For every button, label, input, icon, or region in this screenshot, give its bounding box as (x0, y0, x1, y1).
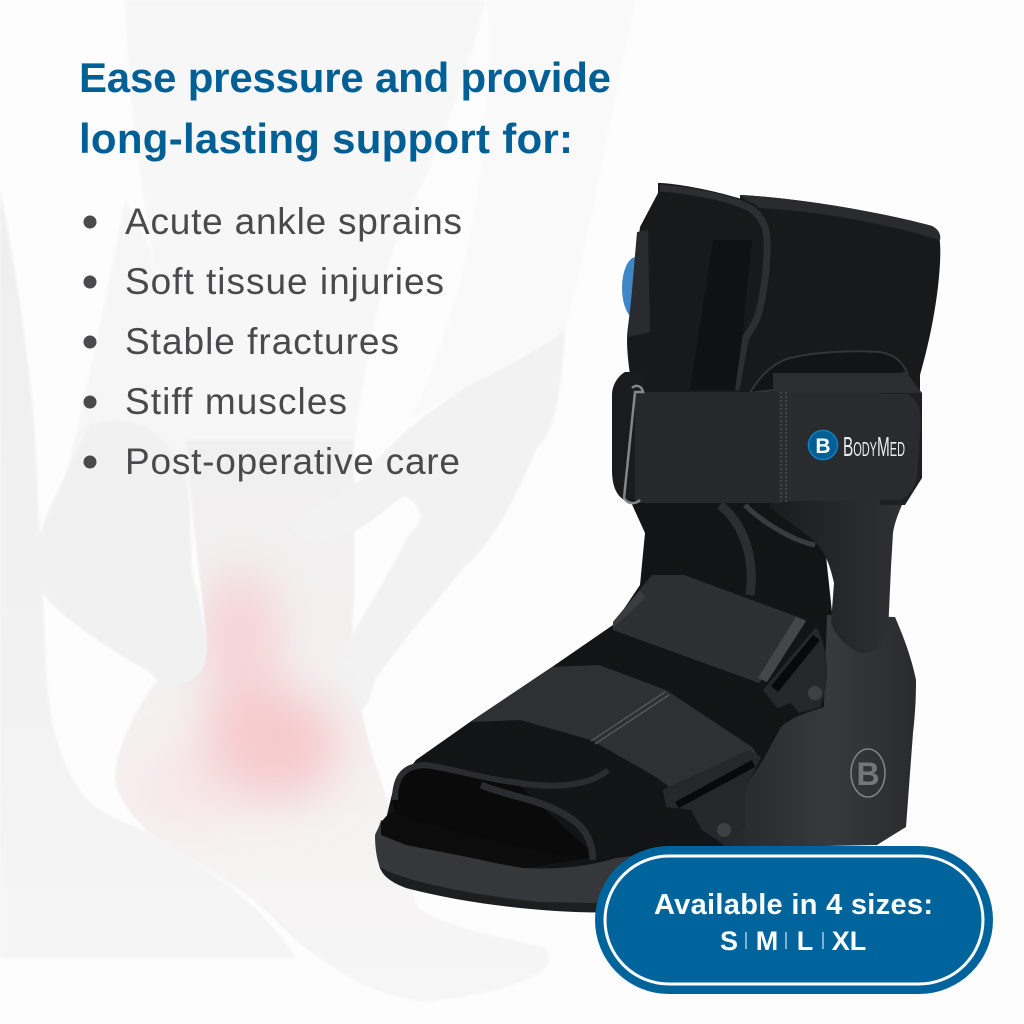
BodyMed logo (808, 430, 905, 462)
item: stable fractures: Stable fractures (125, 321, 399, 362)
callout: available sizes: M (756, 926, 778, 956)
metal struts (720, 505, 751, 595)
pump patch (628, 230, 650, 337)
brand mark on heel (851, 749, 885, 797)
callout: available sizes (595, 846, 993, 994)
left hand (34, 420, 207, 689)
callout: available sizes: L (797, 926, 813, 956)
upper foot strap (613, 575, 806, 683)
back strap loop (612, 372, 644, 505)
item: stiff muscles: Stiff muscles (125, 381, 347, 422)
item: acute ankle sprains: Acute ankle sprains (125, 201, 462, 242)
title (79, 54, 611, 162)
callout: available sizes: S (720, 926, 738, 956)
rear shell heel (722, 615, 916, 848)
D ring (624, 386, 643, 503)
right hand (293, 330, 565, 710)
callout: available sizes: Available in 4 sizes: (654, 889, 933, 921)
insole (381, 811, 590, 868)
sleeve rim (740, 195, 940, 240)
BodyMed logo: B (815, 435, 831, 458)
walking boot (375, 183, 940, 913)
front leg and foot (116, 440, 549, 1002)
toe opening (392, 764, 600, 860)
title: long-lasting support for: (79, 115, 573, 162)
upper plate behind strap (750, 351, 922, 505)
item: soft tissue injuries: Soft tissue injuries (125, 261, 444, 302)
left forearm (60, 200, 190, 520)
lower foot strap (470, 665, 759, 793)
toe flap binding (395, 765, 608, 800)
flap edge binding (660, 188, 767, 390)
item: post-operative care: Post-operative care (125, 441, 460, 482)
ankle strap (635, 392, 921, 503)
image: ghosted legs and hands (0, 0, 636, 1002)
brand mark on heel: B (856, 756, 880, 792)
flap groove (690, 240, 752, 390)
conditions list (84, 201, 462, 482)
upper arm ghost, right column (410, 0, 636, 420)
upper arm ghost, left column (125, 0, 485, 450)
lower buckle (663, 750, 761, 847)
callout: available sizes: XL (832, 926, 866, 956)
title: Ease pressure and provide (79, 54, 611, 101)
upper buckle (763, 627, 827, 713)
boot sole (375, 820, 680, 908)
front tongue flap (627, 183, 772, 392)
image: pain glow (168, 566, 354, 817)
upright shell (770, 495, 906, 653)
back leg (0, 190, 296, 958)
BodyMed logo: BodyMed (843, 431, 905, 462)
lower boot silhouette base (381, 500, 835, 875)
strap stitching (781, 392, 786, 503)
air pump bulb (622, 257, 650, 319)
rear calf sleeve (740, 195, 940, 400)
